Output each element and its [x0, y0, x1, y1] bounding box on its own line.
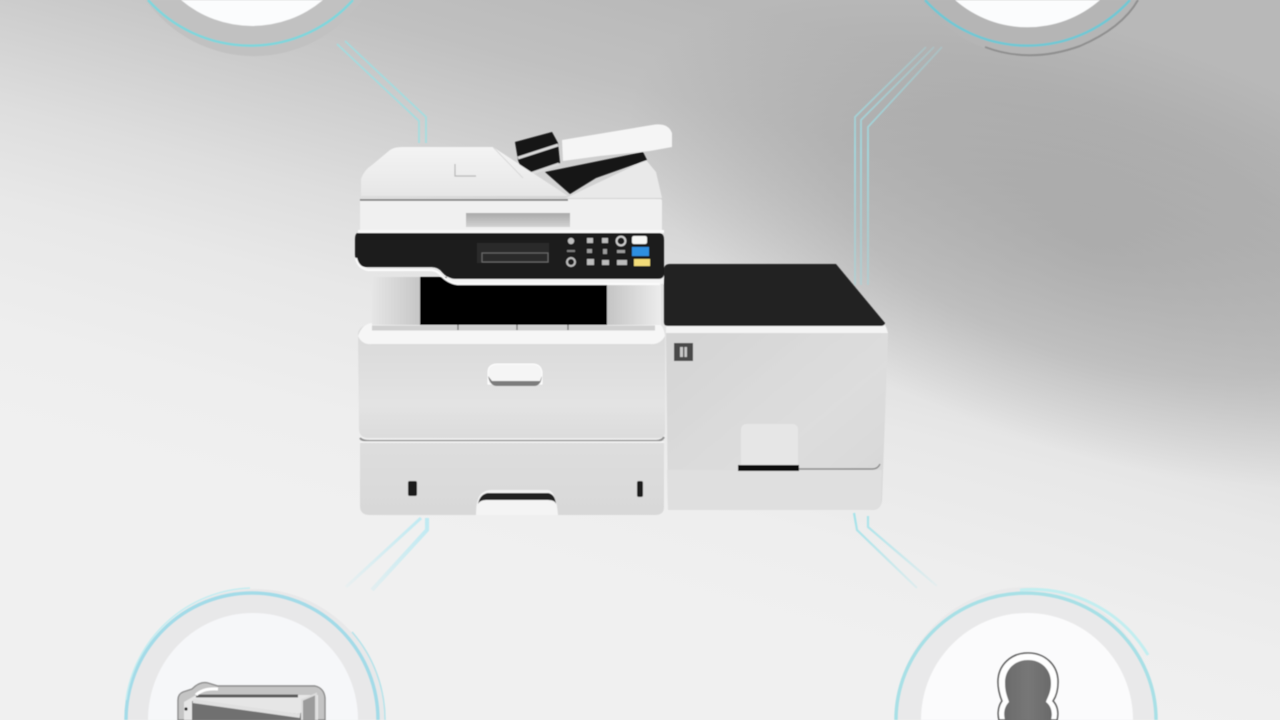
node circle: top-right	[922, 0, 1138, 56]
connector: bottom-left circle to printer	[346, 518, 427, 590]
node circle: top-left	[146, 0, 362, 56]
display screen	[477, 243, 549, 263]
scanner base with slot	[358, 199, 664, 233]
output bay	[372, 277, 661, 325]
printer	[355, 124, 888, 515]
node circle: bottom-right	[895, 587, 1157, 720]
connector: bottom-right circle to printer	[854, 513, 937, 588]
icon: person head in bottom-right circle	[998, 653, 1058, 720]
main printer lower drawer	[360, 437, 664, 515]
connector: top-left circle to printer	[337, 41, 426, 143]
scanner lid	[361, 147, 568, 196]
node circle: bottom-left	[125, 588, 385, 720]
connector: top-right circle to printer	[855, 47, 942, 285]
automatic document feeder	[515, 124, 672, 198]
keypad buttons	[567, 237, 627, 266]
main printer paper cassette	[358, 323, 665, 438]
control panel	[355, 233, 664, 284]
status keys	[632, 236, 650, 266]
icon: device case in bottom-left circle	[178, 683, 325, 720]
right side finisher unit	[664, 264, 888, 510]
